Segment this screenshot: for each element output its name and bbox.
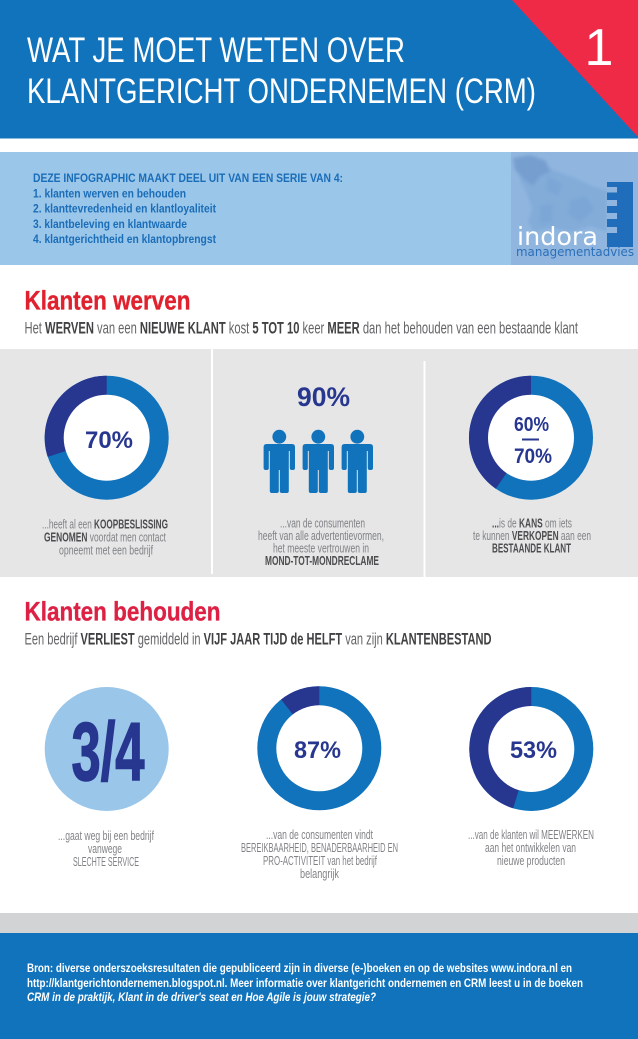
intro text: 2. klanttevredenheid en klantloyaliteit [33, 202, 216, 216]
caption: 53% [468, 827, 594, 868]
caption: 87% [241, 827, 398, 881]
intro text: 1. klanten werven en behouden [33, 186, 186, 200]
title: WAT JE MOET WETEN OVER [27, 31, 405, 70]
caption: 90% [258, 516, 384, 568]
logo: indora managementadvies: managementadvies [516, 244, 634, 259]
red corner triangle [512, 0, 638, 137]
caption: 3/4: vanwege [88, 841, 122, 856]
donut: 70% [45, 376, 169, 500]
donut: 60-70%: 60% [514, 414, 549, 436]
icon: three people [264, 430, 373, 493]
donut: 87% [257, 686, 381, 810]
caption: 87%: belangrijk [300, 866, 339, 881]
caption: 70%: GENOMEN voordat men contact [44, 530, 166, 544]
series number: 1 [585, 19, 613, 77]
donut: 60-70%: 70% [514, 445, 552, 468]
heading: Klanten behouden: Klanten behouden [24, 596, 220, 626]
panel: series intro [0, 152, 638, 265]
header banner [0, 0, 638, 138]
caption: 90%: heeft van alle advertentievormen, [258, 528, 384, 543]
caption: 87%: BEREIKBAARHEID, BENADERBAARHEID EN [241, 840, 398, 855]
panel: werven statistics [0, 349, 638, 577]
caption: 60-70% [473, 516, 591, 556]
caption: 90%: MOND-TOT-MONDRECLAME [265, 553, 379, 568]
caption: 90%: ...van de consumenten [280, 516, 365, 530]
caption: 70%: ...heeft al een KOOPBESLISSING [42, 516, 168, 532]
grey divider band [0, 913, 638, 933]
caption: 60-70%: te kunnen VERKOPEN aan een [473, 528, 591, 543]
donut: 70%: 70% [85, 427, 133, 454]
caption: 3/4: SLECHTE SERVICE [73, 854, 139, 869]
caption: 90%: het meeste vertrouwen in [273, 540, 369, 556]
stat: 90%: 90% [297, 382, 350, 412]
caption: 3/4 [58, 828, 154, 869]
circle: 3/4 [45, 687, 169, 811]
caption: 53%: nieuwe producten [497, 853, 565, 868]
caption: 60-70%: BESTAANDE KLANT [492, 540, 571, 556]
logo: indora managementadvies [511, 152, 638, 265]
donut: 60-70% [469, 376, 593, 500]
logo: indora managementadvies: indora [517, 222, 598, 251]
caption: 3/4: ...gaat weg bij een bedrijf [58, 828, 154, 843]
donut: 53% [469, 687, 593, 811]
intro text: 4. klantgerichtheid en klantopbrengst [33, 232, 216, 246]
subheading: behouden: Een bedrijf VERLIEST gemiddeld in VIJF JAAR TIJD de HELFT van zijn KLANTENBESTAND [24, 630, 492, 648]
caption: 87%: PRO-ACTIVITEIT van het bedrijf [263, 853, 377, 868]
caption: 60-70%: ...is de KANS om iets [492, 516, 572, 530]
caption: 70%: opneemt met een bedrijf [59, 542, 153, 558]
source text: CRM in de praktijk, Klant in de driver's seat en Hoe Agile is jouw strategie? [27, 990, 377, 1004]
title [27, 31, 536, 111]
intro text: 3. klantbeleving en klantwaarde [33, 217, 187, 231]
caption: 53%: aan het ontwikkelen van [485, 840, 576, 855]
heading: Klanten werven: Klanten werven [24, 286, 190, 316]
donut: 87%: 87% [294, 737, 341, 764]
source text [27, 961, 583, 1004]
donut: 53%: 53% [510, 737, 557, 764]
circle: 3/4: 3/4 [72, 705, 144, 798]
intro text: DEZE INFOGRAPHIC MAAKT DEEL UIT VAN EEN SERIE VAN 4: [33, 171, 343, 185]
caption: 87%: ...van de consumenten vindt [266, 827, 373, 842]
intro text [33, 171, 343, 246]
footer [0, 933, 638, 1039]
caption: 70% [42, 516, 168, 558]
